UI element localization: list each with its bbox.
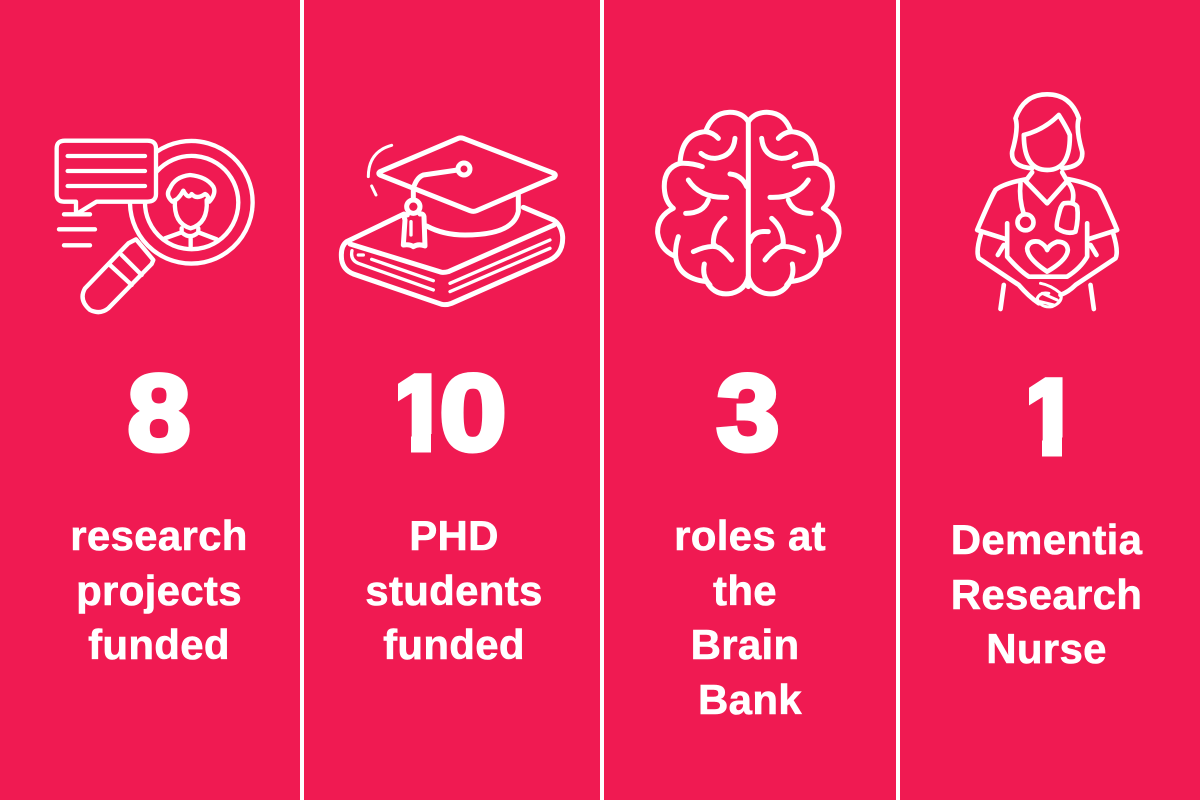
label: roles at the Brain Bank: [674, 512, 826, 722]
label: PHD students funded: [365, 512, 543, 668]
panel: Brain Bank roles: [604, 0, 896, 800]
label: roles at the Brain Bank: Bank: [698, 676, 802, 722]
panel: PHD students: [338, 135, 566, 660]
label: research projects funded: research: [70, 512, 248, 559]
panel: research projects: [0, 0, 300, 800]
label: Dementia Research Nurse: Nurse: [986, 625, 1107, 672]
number: 10: 1: [389, 352, 449, 473]
icon: nurse with heart and stethoscope: [974, 92, 1120, 312]
number: 3: 3: [716, 352, 780, 473]
number: 1: 1: [1020, 356, 1080, 476]
icon: graduation cap on a book: [338, 135, 566, 308]
label: research projects funded: funded: [88, 621, 230, 668]
panel: Dementia Research Nurse: [953, 92, 1143, 664]
label: PHD students funded: PHD: [409, 512, 499, 559]
label: Dementia Research Nurse: [951, 516, 1143, 672]
label: roles at the Brain Bank: roles at: [674, 512, 826, 559]
icon: brain: [655, 110, 842, 296]
label: PHD students funded: funded: [383, 621, 525, 668]
label: research projects funded: [70, 512, 248, 668]
label: Dementia Research Nurse: Dementia: [951, 516, 1142, 563]
label: roles at the Brain Bank: Brain: [691, 621, 799, 668]
number: 8: 8: [127, 352, 191, 473]
label: roles at the Brain Bank: the: [713, 566, 777, 614]
number: 10: [398, 352, 507, 473]
label: research projects funded: projects: [76, 566, 242, 614]
label: Dementia Research Nurse: Research: [951, 570, 1142, 618]
label: PHD students funded: students: [365, 566, 543, 614]
number: 10: 0: [439, 352, 507, 473]
